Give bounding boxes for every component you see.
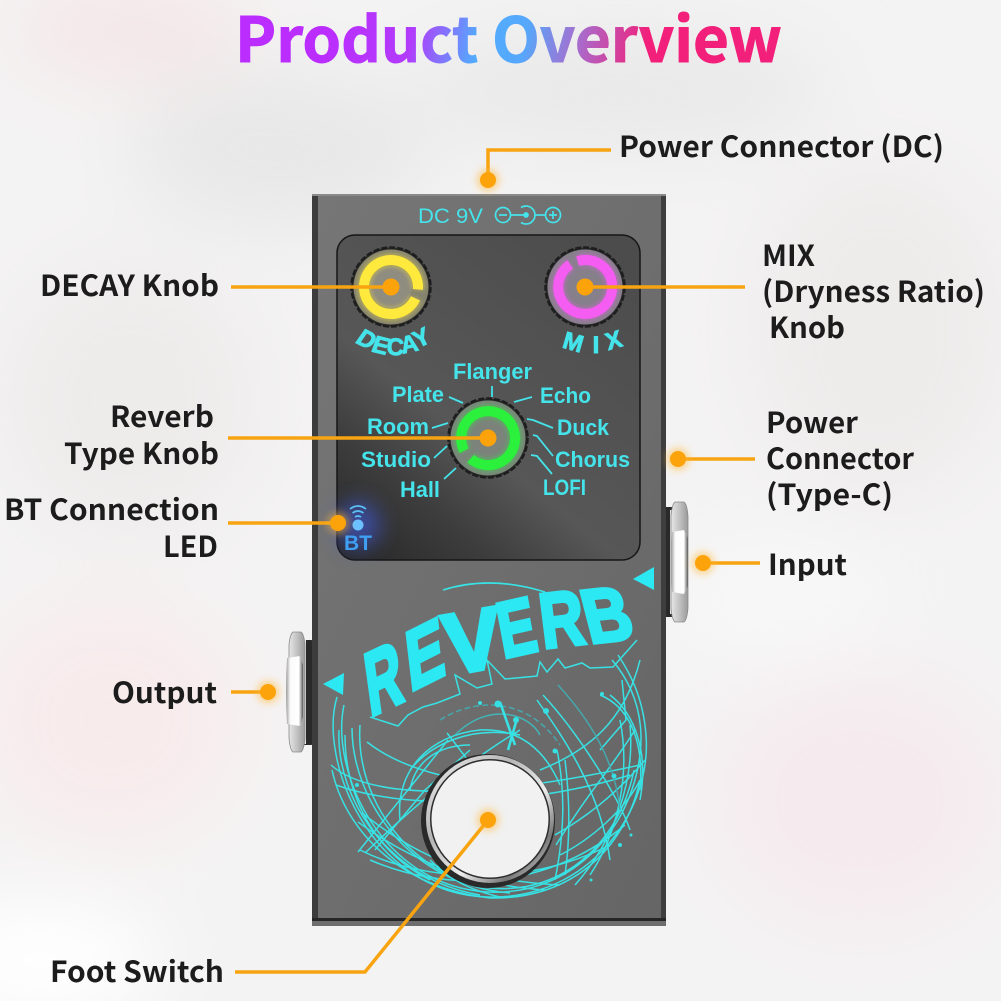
callout: MIX knob: Knob — [769, 305, 845, 347]
callout: power connector Type-C: (Type-C) — [766, 472, 893, 514]
REVERB logo lettering: E — [401, 600, 449, 710]
callout: MIX knob — [576, 233, 985, 347]
callout: reverb type knob — [64, 394, 496, 473]
callout: power connector Type-C — [667, 400, 914, 514]
callout: power connector Type-C: Connector — [766, 436, 914, 478]
reverb mode labels: Duck — [557, 415, 610, 440]
callout: power connector DC — [477, 124, 944, 191]
callout: BT connection LED: BT Connection — [4, 487, 219, 529]
MIX knob label — [560, 326, 625, 359]
pedal enclosure — [312, 194, 666, 926]
callout: MIX knob: MIX — [762, 233, 815, 275]
callout: DECAY knob: DECAY Knob — [40, 263, 219, 305]
reverb mode labels: Echo — [540, 383, 591, 408]
REVERB logo lettering: B — [573, 571, 641, 660]
reverb mode labels: Room — [367, 414, 429, 439]
DECAY knob label: A — [398, 330, 421, 360]
callout: power connector DC: Power Connector (DC) — [619, 124, 944, 166]
callout: foot switch: Foot Switch — [50, 949, 224, 991]
callout: power connector Type-C: Power — [766, 400, 858, 442]
MIX knob label: X — [603, 326, 625, 356]
callout: MIX knob: (Dryness Ratio) — [762, 269, 985, 311]
input jack — [664, 502, 688, 622]
reverb mode labels: Hall — [400, 477, 440, 502]
reverb mode labels: Flanger — [453, 359, 532, 384]
REVERB logo lettering: E — [490, 581, 543, 675]
icon: DC polarity symbol — [496, 206, 560, 224]
wireframe sphere artwork — [331, 583, 646, 898]
MIX knob label: M — [560, 327, 586, 359]
icon: Bluetooth LED: BT — [344, 532, 372, 555]
DECAY knob label: C — [386, 334, 404, 361]
foot switch — [421, 754, 555, 888]
icon: Bluetooth LED — [344, 506, 372, 555]
REVERB logo lettering: V — [437, 589, 508, 694]
REVERB logo lettering — [359, 571, 641, 736]
MIX knob label: I — [593, 332, 599, 359]
reverb mode labels: Studio — [361, 447, 431, 472]
callout: reverb type knob: Type Knob — [64, 431, 219, 473]
REVERB logo lettering: R — [359, 622, 408, 736]
output jack — [286, 632, 313, 752]
callout: output: Output — [112, 670, 217, 712]
callout: BT connection LED: LED — [163, 524, 218, 566]
callout: input — [692, 542, 847, 584]
callout: reverb type knob: Reverb — [110, 394, 214, 436]
direction arrow: output — [323, 673, 344, 695]
DECAY knob label: Y — [409, 323, 435, 354]
DECAY knob label: E — [368, 331, 393, 361]
reverb type knob — [448, 398, 528, 478]
callout: input: Input — [768, 542, 847, 584]
reverb mode labels — [361, 359, 630, 502]
direction arrow: input — [633, 567, 654, 590]
callout: BT connection LED — [4, 487, 349, 566]
reverb mode labels: Plate — [392, 382, 444, 407]
panel: control screen — [336, 235, 640, 560]
REVERB logo lettering: R — [535, 574, 589, 665]
DECAY knob — [352, 248, 430, 326]
power rating text: DC 9V — [418, 205, 483, 228]
reverb mode labels: Chorus — [555, 447, 630, 472]
mode tick marks — [432, 386, 553, 479]
MIX knob — [546, 248, 624, 326]
reverb mode labels: LOFI — [543, 475, 586, 500]
DECAY knob label — [351, 323, 435, 361]
callout: output — [112, 670, 279, 712]
callout: DECAY knob — [40, 263, 400, 305]
callout: foot switch — [50, 809, 499, 991]
DECAY knob label: D — [351, 325, 382, 355]
logo 3D extrusion outline — [370, 640, 637, 726]
